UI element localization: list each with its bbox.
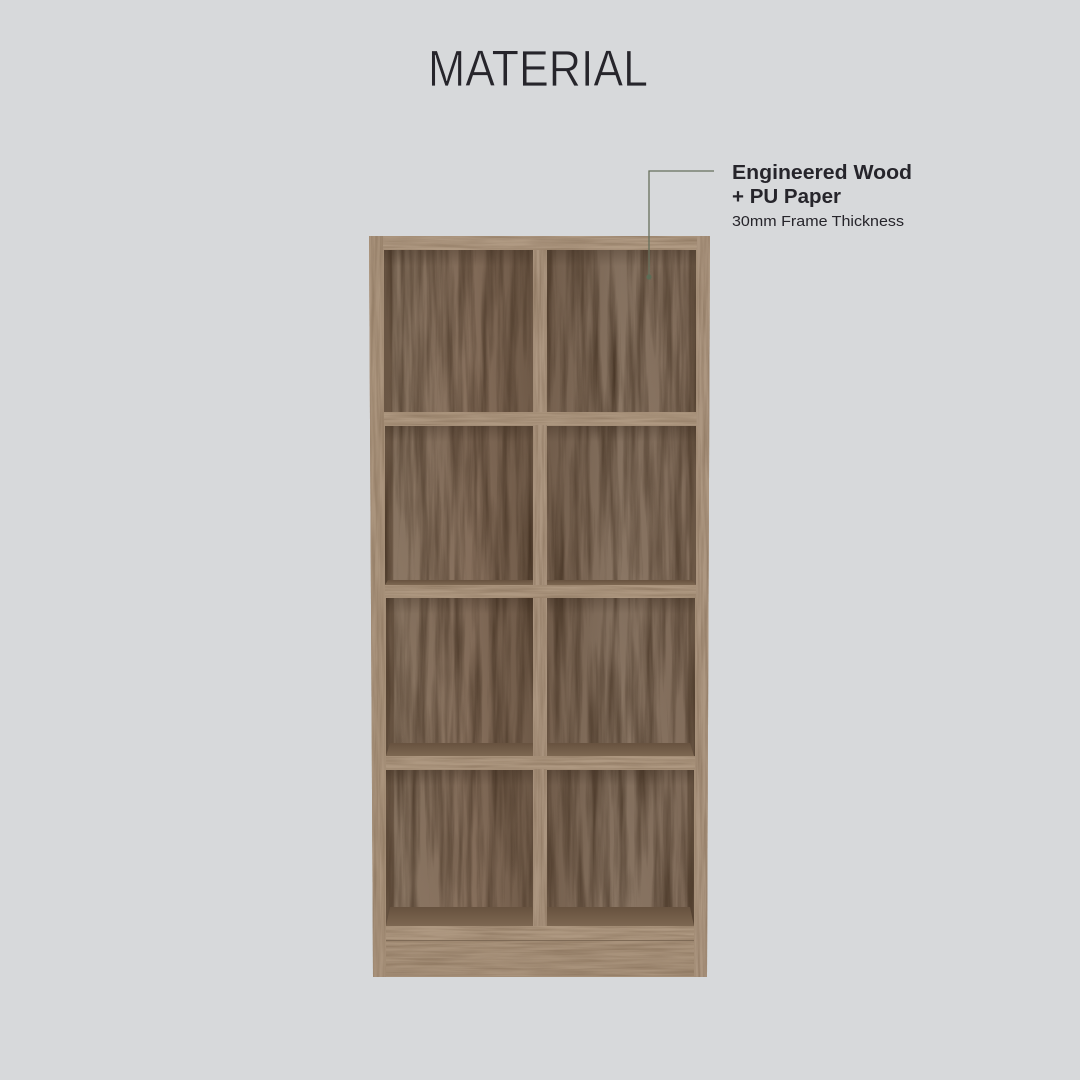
shelf rail 3 (386, 756, 695, 769)
callout heading: + PU Paper (732, 185, 841, 208)
title: MATERIAL (428, 40, 648, 97)
shelf rail 2 (385, 585, 696, 598)
callout heading (732, 161, 912, 208)
centre divider (533, 250, 547, 927)
bookshelf (369, 236, 710, 977)
left side post (369, 236, 386, 977)
callout text (732, 161, 912, 230)
callout heading: Engineered Wood (732, 161, 912, 184)
top rail (382, 236, 698, 250)
compartment: row 4 left (386, 770, 533, 927)
callout subtext: 30mm Frame Thickness (732, 213, 904, 230)
callout leader line (646, 171, 714, 280)
compartment: row 2 left (385, 426, 533, 585)
plinth (386, 940, 694, 976)
compartment: row 3 right (547, 598, 695, 756)
shelf rail 1 (384, 412, 697, 425)
compartment: row 1 right (547, 250, 696, 412)
compartment: row 4 right (547, 770, 694, 927)
compartment: row 2 right (547, 426, 696, 585)
compartment: row 3 left (386, 598, 533, 756)
shelf body backing (369, 236, 710, 977)
plinth top seam (386, 940, 694, 941)
right side post (695, 236, 710, 977)
compartment: row 1 left (384, 250, 533, 412)
shelf rail 4 (386, 926, 694, 940)
